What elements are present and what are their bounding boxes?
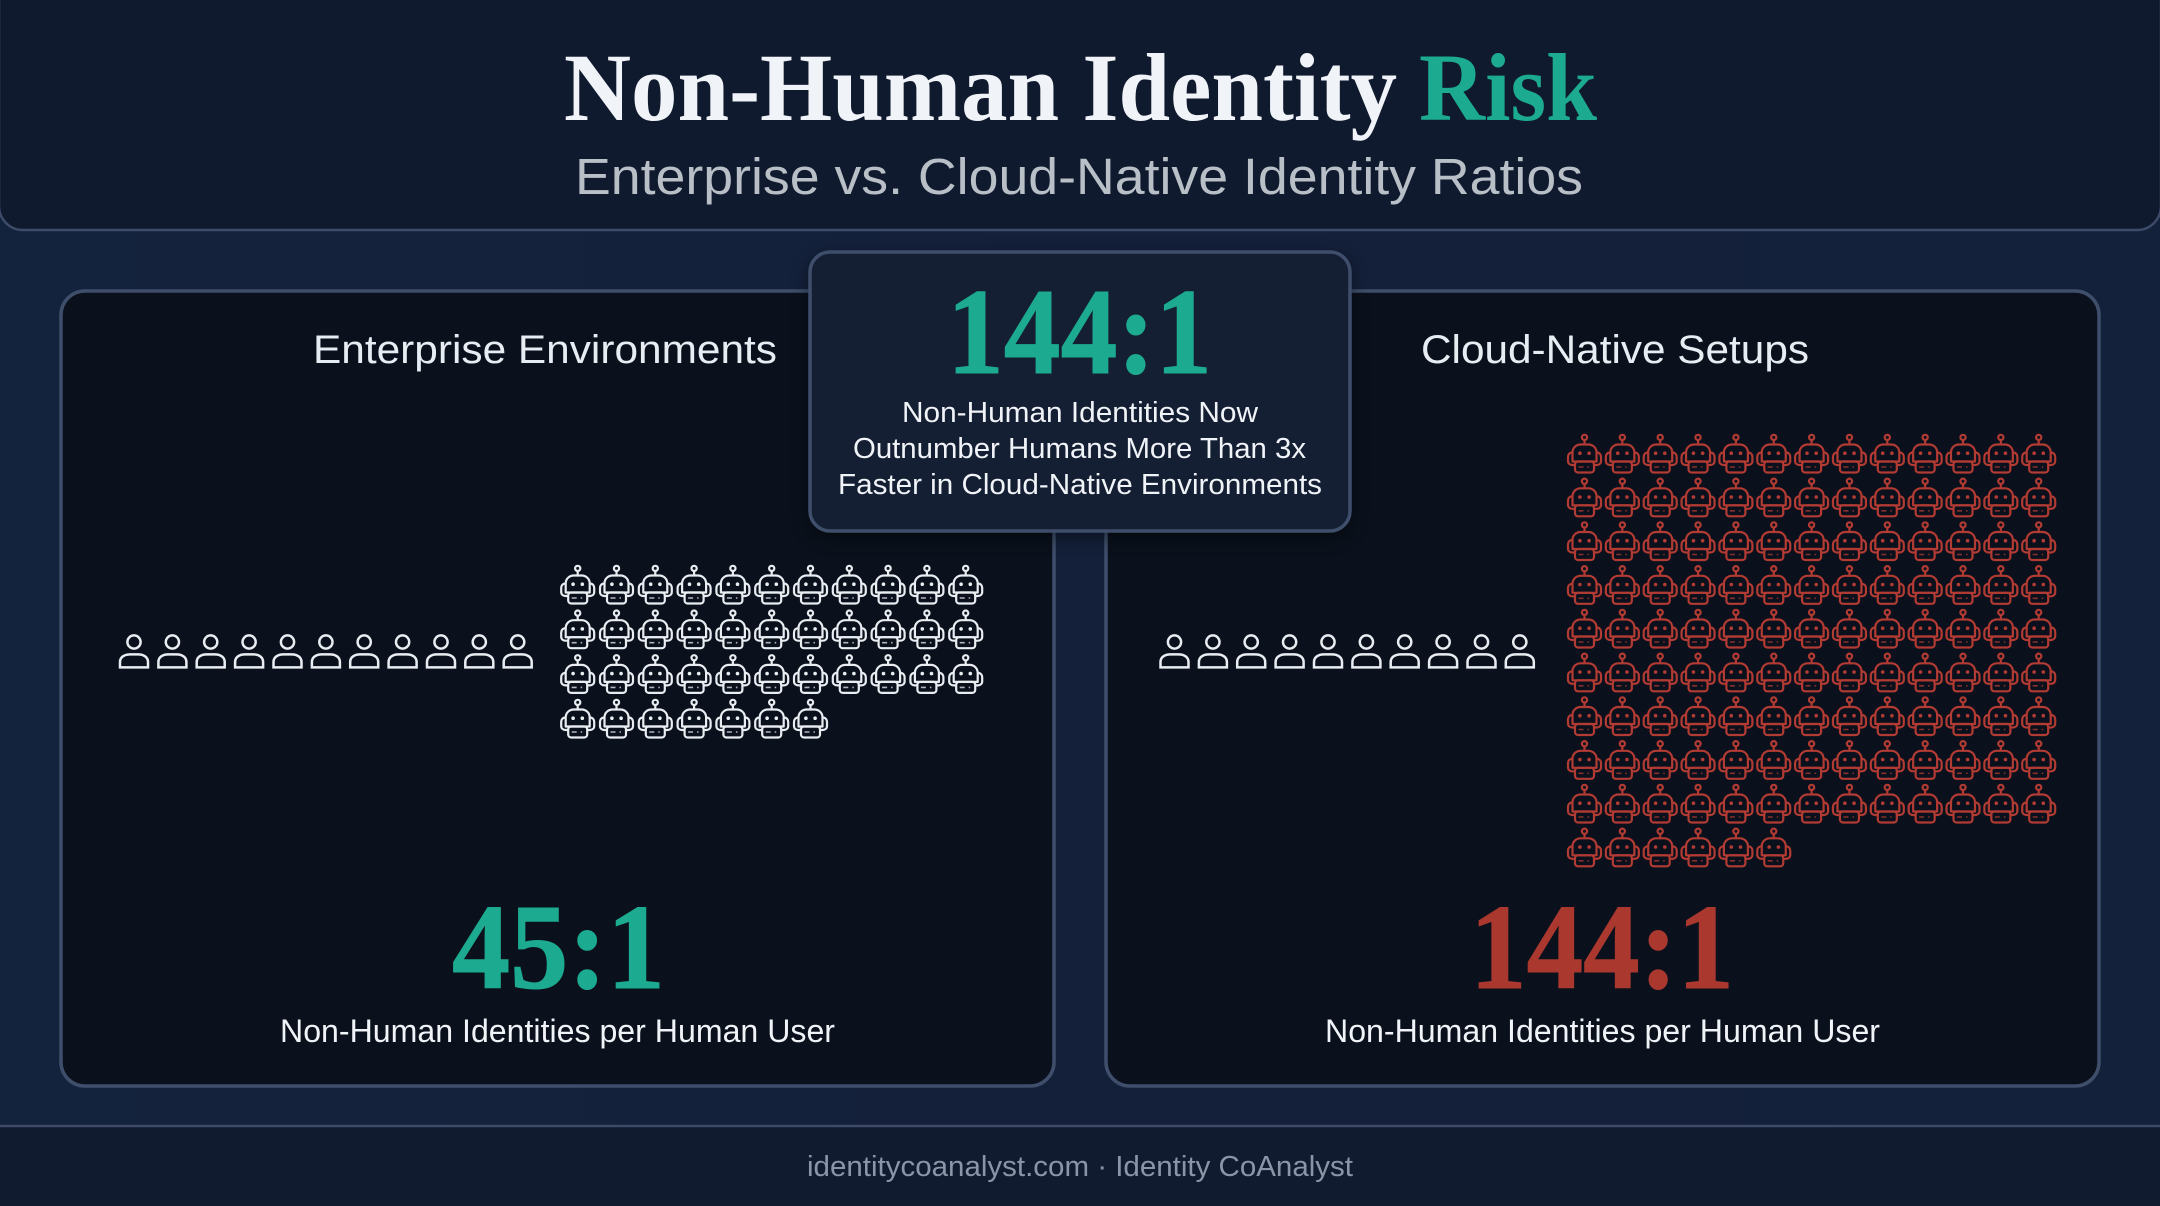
- cloud-native heading: Cloud-Native Setups: [1421, 328, 1809, 372]
- icons: human users (cloud-native): [1160, 635, 1534, 667]
- callout line 1: Non-Human Identities Now: [902, 397, 1259, 429]
- enterprise panel background: [61, 291, 1054, 1086]
- footer band: [0, 1126, 2160, 1206]
- callout line 2: Outnumber Humans More Than 3x: [853, 433, 1307, 465]
- icons: robots (enterprise): [561, 566, 982, 738]
- icons: human users (enterprise): [120, 635, 532, 667]
- enterprise heading: Enterprise Environments: [313, 328, 777, 372]
- title: Non-Human Identity: Non-Human Identity: [564, 34, 1397, 141]
- panel: enterprise environments: [61, 291, 1054, 1086]
- panel: cloud-native setups: [1106, 291, 2099, 1086]
- callout line 3: Faster in Cloud-Native Environments: [838, 469, 1322, 501]
- header panel: [0, 0, 2160, 230]
- enterprise ratio 45:1: 45:1: [452, 880, 665, 1015]
- subtitle: Enterprise vs. Cloud-Native Identity Ratios: [575, 148, 1583, 205]
- title: [564, 34, 1598, 141]
- callout shadow: [809, 256, 1351, 538]
- callout text: [838, 397, 1322, 501]
- enterprise ratio caption: Non-Human Identities per Human User: [280, 1013, 835, 1049]
- icons: robots (cloud-native): [1568, 435, 2055, 866]
- callout box: [810, 252, 1350, 531]
- footer panel: [0, 1126, 2160, 1206]
- callout ratio 144:1: 144:1: [947, 263, 1212, 400]
- title: Risk: Risk: [1419, 34, 1598, 141]
- cloud-native ratio 144:1: 144:1: [1470, 880, 1734, 1015]
- footer text: identitycoanalyst.com · Identity CoAnalyst: [807, 1151, 1353, 1183]
- callout: headline stat: [809, 252, 1351, 538]
- cloud-native ratio caption: Non-Human Identities per Human User: [1325, 1013, 1880, 1049]
- cloud-native panel background: [1106, 291, 2099, 1086]
- header band: [0, 0, 2160, 230]
